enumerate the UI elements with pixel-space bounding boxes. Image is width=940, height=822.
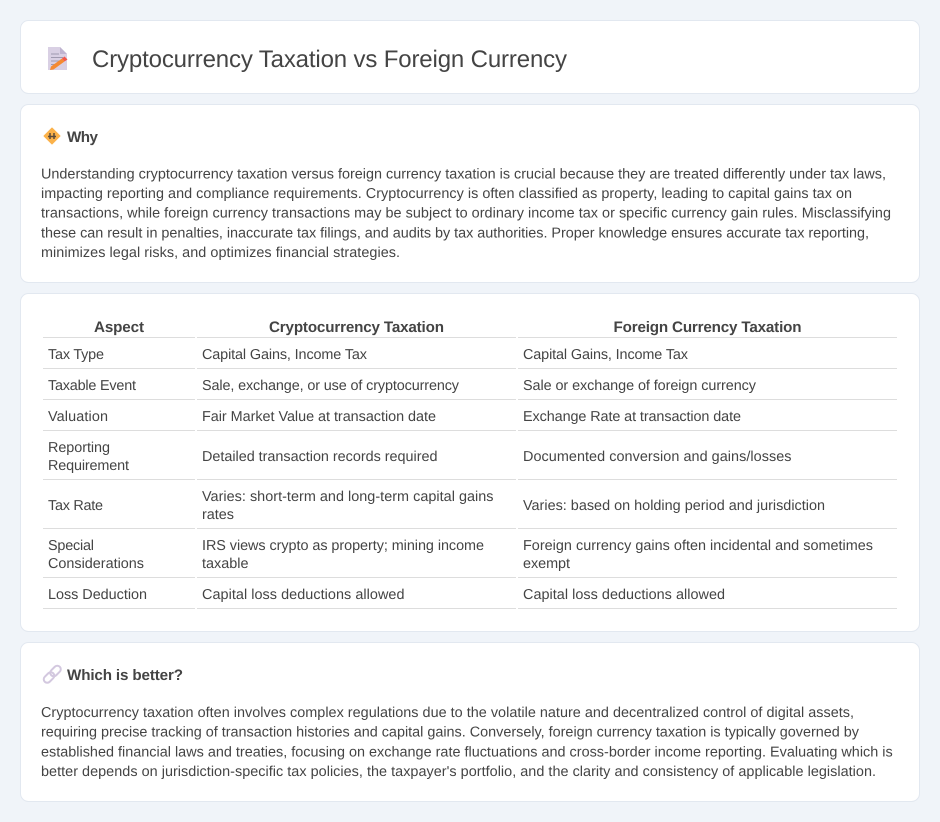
row: special considerations: Considerations bbox=[48, 556, 144, 572]
text block: which is better paragraph: better depends on jurisdiction-specific tax policies, the taxpayer's portfolio, and the clarity and consistency of applicable legislation. bbox=[41, 764, 876, 780]
text block: why paragraph: impacting reporting and compliance requirements. Cryptocurrency is often classified as property, leading to capital gains tax on bbox=[41, 186, 852, 202]
table row dividers bbox=[43, 337, 897, 609]
panel: which is better bbox=[20, 642, 920, 802]
text block: why paragraph: minimizes legal risks, and optimizes financial strategies. bbox=[41, 245, 400, 261]
panel: why bbox=[20, 104, 920, 282]
row: loss deduction: Loss Deduction bbox=[48, 587, 147, 603]
row: loss deduction bbox=[48, 587, 725, 603]
row: tax type bbox=[48, 347, 689, 363]
row: valuation bbox=[48, 409, 741, 425]
row: loss deduction: Capital loss deductions allowed bbox=[523, 587, 725, 603]
row: reporting requirement: Reporting bbox=[48, 440, 110, 456]
row: reporting requirement bbox=[48, 440, 792, 474]
row: tax rate: Varies: short-term and long-term capital gains bbox=[202, 489, 494, 505]
text block: why paragraph: Understanding cryptocurrency taxation versus foreign currency taxation is crucial because they are treated differently under tax laws, bbox=[41, 166, 886, 182]
row: special considerations: Special bbox=[48, 538, 94, 554]
row: reporting requirement: Documented conversion and gains/losses bbox=[523, 449, 792, 465]
row: reporting requirement: Requirement bbox=[48, 458, 129, 474]
text block: which is better paragraph: requiring precise tracking of transaction histories and capital gains. Conversely, foreign currency taxation is typically governed by bbox=[41, 725, 860, 741]
row: taxable event: Taxable Event bbox=[48, 378, 136, 394]
heading: which is better: Which is better? bbox=[67, 667, 183, 684]
text block: which is better paragraph: Cryptocurrency taxation often involves complex regulations due to the volatile nature and decentralized control of digital assets, bbox=[41, 705, 854, 721]
row: special considerations: exempt bbox=[523, 556, 570, 572]
row: valuation: Exchange Rate at transaction date bbox=[523, 409, 741, 425]
row: special considerations: taxable bbox=[202, 556, 248, 572]
row: tax rate: rates bbox=[202, 507, 234, 523]
row: valuation: Fair Market Value at transaction date bbox=[202, 409, 436, 425]
table header row bbox=[94, 319, 802, 336]
row: loss deduction: Capital loss deductions allowed bbox=[202, 587, 404, 603]
text block: why paragraph: these can result in penalties, inaccurate tax filings, and audits by tax authorities. Proper knowledge ensures accurate tax reporting, bbox=[41, 225, 869, 241]
text block: which is better paragraph: established financial laws and treaties, focusing on exchange rate fluctuations and cross-border income reporting. Evaluating which is bbox=[41, 744, 893, 760]
panel: comparison table bbox=[20, 294, 920, 632]
row: tax rate: Tax Rate bbox=[48, 498, 103, 514]
table header row: Foreign Currency Taxation bbox=[614, 319, 802, 336]
icon: orange diamond sign bbox=[44, 128, 60, 144]
text block: why paragraph bbox=[41, 166, 891, 261]
table header row: Cryptocurrency Taxation bbox=[269, 319, 444, 336]
title: Cryptocurrency Taxation vs Foreign Currency bbox=[92, 46, 567, 73]
icon: chain link bbox=[42, 664, 62, 684]
row: reporting requirement: Detailed transaction records required bbox=[202, 449, 438, 465]
row: tax type: Capital Gains, Income Tax bbox=[202, 347, 368, 363]
row: tax rate bbox=[48, 489, 825, 523]
row: tax type: Capital Gains, Income Tax bbox=[523, 347, 689, 363]
icon: document with pencil bbox=[48, 47, 68, 70]
row: special considerations: Foreign currency gains often incidental and sometimes bbox=[523, 538, 873, 554]
row: tax rate: Varies: based on holding period and jurisdiction bbox=[523, 498, 825, 514]
row: taxable event: Sale, exchange, or use of cryptocurrency bbox=[202, 378, 460, 394]
row: taxable event: Sale or exchange of foreign currency bbox=[523, 378, 757, 394]
text block: which is better paragraph bbox=[41, 705, 893, 780]
panel: header bbox=[20, 20, 920, 94]
row: valuation: Valuation bbox=[48, 409, 108, 425]
row: tax type: Tax Type bbox=[48, 347, 104, 363]
row: special considerations bbox=[48, 538, 873, 572]
table header row: Aspect bbox=[94, 319, 144, 336]
row: special considerations: IRS views crypto as property; mining income bbox=[202, 538, 484, 554]
heading: why: Why bbox=[67, 129, 99, 146]
text block: why paragraph: transactions, while foreign currency transactions may be subject to ordinary income tax or specific currency gain rules. Misclassifying bbox=[41, 206, 891, 222]
row: taxable event bbox=[48, 378, 757, 394]
